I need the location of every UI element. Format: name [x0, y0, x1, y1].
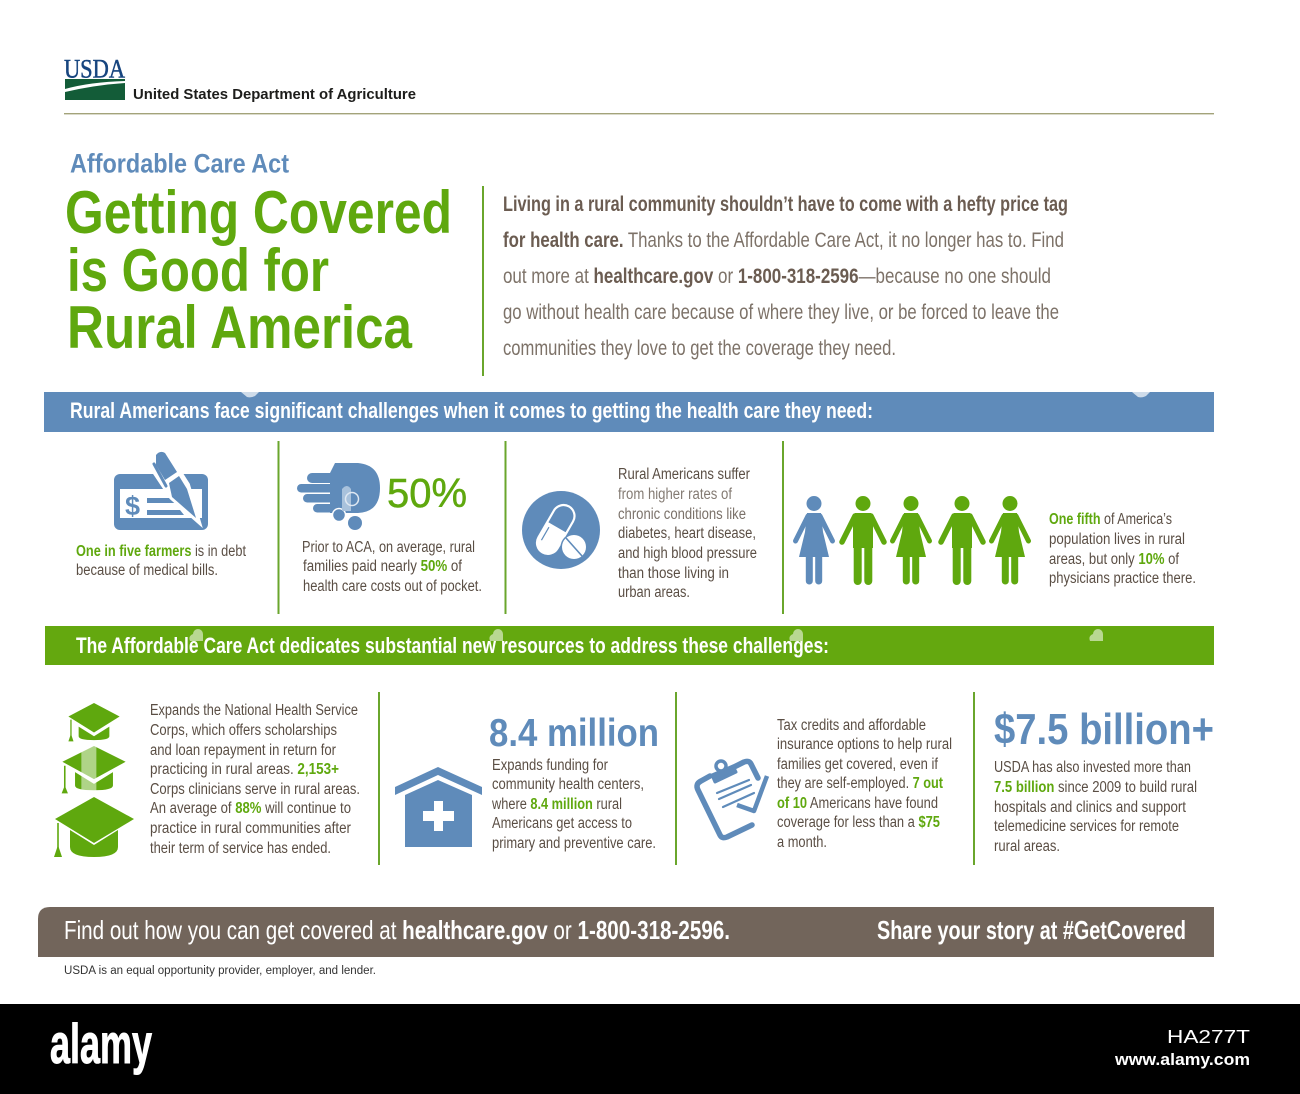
banner: challenges — [44, 392, 1214, 432]
icon: house with cross — [395, 767, 482, 847]
text: conditions: and high blood pressure — [618, 545, 757, 562]
equal opportunity note: USDA is an equal opportunity provider, employer, and lender. — [64, 965, 376, 977]
text: tax credits: insurance options to help rural — [777, 736, 952, 753]
text: costs — [302, 539, 482, 595]
text: tax credits: a month. — [777, 834, 827, 851]
kicker: Affordable Care Act: Affordable Care Act — [70, 148, 289, 178]
text: conditions: diabetes, heart disease, — [618, 525, 756, 542]
intro paragraph: go without health care because of where they live, or be forced to leave the — [503, 301, 1059, 324]
intro paragraph — [503, 193, 1068, 360]
text: physicians: One fifth of America’s — [1049, 511, 1172, 528]
text: health centers: Expands funding for — [492, 757, 608, 774]
text: conditions: chronic conditions like — [618, 506, 746, 523]
text: conditions: from higher rates of — [618, 486, 733, 503]
text: tax credits — [777, 717, 952, 851]
text: conditions: Rural Americans suffer — [618, 466, 750, 483]
title: Rural America — [67, 294, 413, 361]
banner: resources — [45, 626, 1214, 665]
text: investment: hospitals and clinics and support — [994, 799, 1187, 816]
title — [65, 179, 452, 361]
icon: green man figure — [842, 496, 884, 581]
text: corps: Corps clinicians serve in rural areas. — [150, 781, 360, 798]
text: tax credits: they are self-employed. 7 out — [777, 775, 943, 792]
text: corps: their term of service has ended. — [150, 840, 331, 857]
icon: check and pen — [114, 452, 208, 530]
banner: challenges: Rural Americans face significant challenges when it comes to getting the health care they need: — [70, 398, 873, 423]
text: conditions: than those living in — [618, 565, 729, 582]
icon: medium graduation cap — [62, 744, 126, 797]
stock photo footer band: alamy — [50, 1012, 152, 1075]
icon: green man figure — [941, 496, 983, 581]
text: tax credits: families get covered, even if — [777, 756, 939, 773]
text: physicians: population lives in rural — [1049, 531, 1185, 548]
intro paragraph: communities they love to get the coverage they need. — [503, 337, 896, 360]
stock photo footer band: HA277T — [1167, 1027, 1250, 1047]
header: USDA logo and department name — [64, 54, 416, 103]
text: health centers: Americans get access to — [492, 815, 632, 832]
text: farmers: One in five farmers is in debt — [76, 543, 247, 560]
text: costs: Prior to ACA, on average, rural — [302, 539, 475, 556]
text: farmers — [76, 543, 247, 579]
icon: clipboard — [697, 761, 767, 838]
text: investment: USDA has also invested more than — [994, 759, 1191, 776]
stock photo footer band: www.alamy.com — [1114, 1050, 1250, 1069]
stat: $7.5 billion+: $7.5 billion+ — [994, 705, 1214, 754]
text: health centers — [491, 757, 656, 852]
text: corps: Corps, which offers scholarships — [150, 722, 337, 739]
text: tax credits: Tax credits and affordable — [777, 717, 926, 734]
text: costs: health care costs out of pocket. — [303, 578, 482, 595]
icon: check and pen: $ — [125, 491, 140, 521]
icon: small graduation cap — [68, 703, 120, 741]
icon: green woman figure — [992, 496, 1028, 581]
icon: hand dropping coins — [297, 463, 380, 530]
text: tax credits: of 10 Americans have found — [777, 795, 938, 812]
icon: green woman figure — [892, 496, 930, 581]
panel: national health service corps — [54, 702, 360, 857]
stat: 8.4 million: 8.4 million — [489, 712, 659, 755]
icon: USDA logo: USDA — [64, 54, 125, 84]
stat: 50%: 50% — [387, 470, 467, 516]
text: investment: 7.5 billion since 2009 to build rural — [994, 779, 1197, 796]
intro paragraph: out more at healthcare.gov or 1-800-318-2596—because no one should — [503, 265, 1051, 288]
text: health centers: community health centers, — [492, 776, 644, 793]
text: farmers: because of medical bills. — [76, 562, 218, 579]
text: corps: Expands the National Health Service — [150, 702, 358, 719]
icon: blue woman figure — [796, 496, 832, 581]
footer banner: call to action — [38, 907, 1214, 957]
text: corps — [150, 702, 360, 857]
text: health centers: primary and preventive care. — [492, 835, 656, 852]
text: investment — [994, 759, 1197, 855]
title: Getting Covered — [65, 179, 452, 246]
footer banner: call to action: Find out how you can get covered at healthcare.gov or 1-800-318-2596. — [64, 915, 730, 945]
intro paragraph: for health care. Thanks to the Affordable Care Act, it no longer has to. Find — [503, 229, 1064, 252]
text: corps: and loan repayment in return for — [150, 742, 336, 759]
text: conditions — [618, 466, 757, 601]
icon: USDA logo — [64, 54, 125, 100]
text: conditions: urban areas. — [618, 584, 690, 601]
text: physicians: areas, but only 10% of — [1049, 551, 1180, 568]
panel: tax credits — [697, 717, 952, 851]
panel: community health centers — [395, 712, 659, 852]
panel: physicians — [796, 496, 1196, 587]
panel: chronic conditions — [522, 466, 757, 601]
text: investment: telemedicine services for remote — [994, 818, 1179, 835]
panel: out of pocket costs — [297, 463, 482, 595]
banner: resources: The Affordable Care Act dedicates substantial new resources to address these challenges: — [76, 633, 829, 658]
text: corps: practicing in rural areas. 2,153+ — [150, 761, 339, 778]
text: costs: families paid nearly 50% of — [303, 558, 463, 575]
text: physicians — [1049, 511, 1196, 587]
stock photo footer band — [0, 1004, 1300, 1094]
icon: pills in circle — [522, 491, 600, 569]
department name: United States Department of Agriculture — [133, 86, 416, 103]
panel: farmers in debt — [76, 452, 247, 579]
intro paragraph: Living in a rural community shouldn’t have to come with a hefty price tag — [503, 193, 1068, 216]
panel: USDA investment — [994, 705, 1214, 855]
title: is Good for — [67, 237, 329, 304]
footer banner: call to action: Share your story at #GetCovered — [877, 915, 1186, 945]
text: corps: practice in rural communities after — [150, 820, 351, 837]
text: physicians: physicians practice there. — [1049, 570, 1196, 587]
text: corps: An average of 88% will continue to — [150, 800, 351, 817]
text: tax credits: coverage for less than a $75 — [777, 814, 940, 831]
icon: large graduation cap — [54, 797, 134, 857]
text: investment: rural areas. — [994, 838, 1060, 855]
text: health centers: where 8.4 million rural — [491, 796, 622, 813]
